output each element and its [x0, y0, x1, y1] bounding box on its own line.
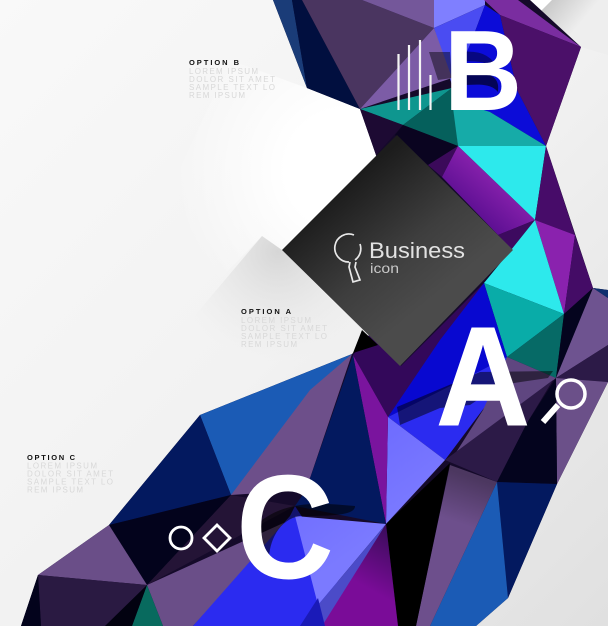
icon: magnifier in diamond [335, 234, 361, 282]
shadows behind letters [255, 52, 553, 575]
heading: Business icon: Business [369, 238, 465, 263]
text: option B: REM IPSUM [189, 91, 245, 100]
text: option B: DOLOR SIT AMET [189, 75, 275, 84]
diamond panel [282, 135, 513, 366]
panel: polygon mosaic lower left [21, 354, 398, 626]
icon: diamond [204, 525, 230, 551]
icon: circle [170, 527, 192, 549]
text: option C [27, 453, 113, 494]
text: option C: OPTION C [27, 453, 76, 462]
panel: polygon mosaic top B [273, 0, 581, 165]
panel: polygon mosaic middle [428, 146, 608, 484]
text: option A: OPTION A [241, 307, 292, 316]
heading: Business icon: icon [370, 260, 399, 276]
letter B: B [444, 8, 522, 135]
letter A: A [436, 297, 530, 455]
icon: bars [398, 40, 430, 110]
text: option B: SAMPLE TEXT LO [189, 83, 275, 92]
text: option C: REM IPSUM [27, 486, 83, 494]
text: option A: LOREM IPSUM [241, 316, 311, 325]
text: option B: LOREM IPSUM [189, 67, 258, 76]
text: option A: REM IPSUM [241, 340, 297, 349]
icon: search [543, 380, 585, 422]
text: option C: DOLOR SIT AMET [27, 470, 113, 478]
panel: polygon mosaic right lower [353, 283, 557, 626]
text: option C: SAMPLE TEXT LO [27, 478, 113, 486]
letter C: C [236, 445, 334, 610]
text: option A: DOLOR SIT AMET [241, 324, 327, 333]
text: option A [241, 307, 327, 349]
heading: Business icon [369, 238, 465, 276]
text: option B: OPTION B [189, 58, 240, 67]
text: option C: LOREM IPSUM [27, 462, 97, 470]
text: option B [189, 58, 275, 100]
text: option A: SAMPLE TEXT LO [241, 332, 327, 341]
